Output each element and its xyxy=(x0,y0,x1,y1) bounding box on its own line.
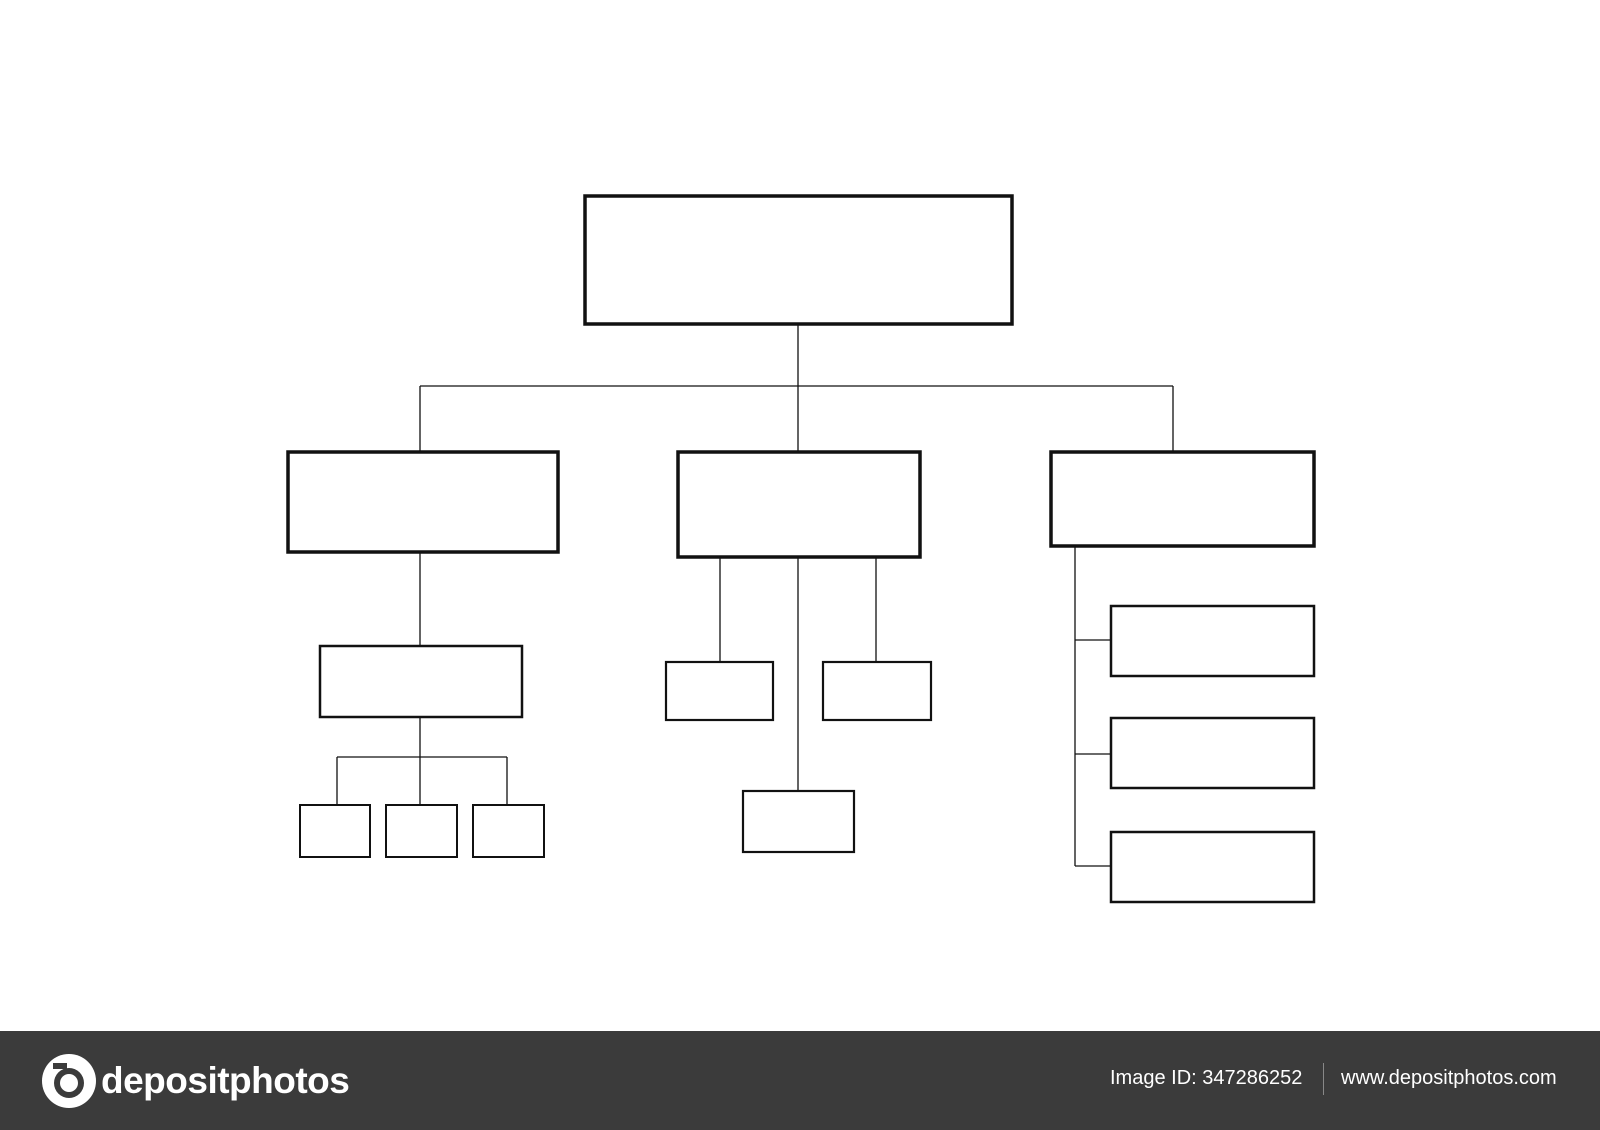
website: www.depositphotos.com xyxy=(1341,1067,1557,1089)
image id: Image ID: 347286252 xyxy=(1110,1067,1302,1089)
box: level 2 middle xyxy=(678,452,920,557)
logo: depositphotos xyxy=(101,1060,349,1101)
box: level 2 left xyxy=(288,452,558,552)
boxes: middle children xyxy=(666,662,931,852)
box: left level 3 xyxy=(320,646,522,717)
box: top xyxy=(585,196,1012,324)
box: level 2 right xyxy=(1051,452,1314,546)
icon: camera logo xyxy=(42,1054,96,1108)
boxes: right children xyxy=(1111,606,1314,902)
logo xyxy=(42,1054,349,1108)
footer bar xyxy=(0,1031,1600,1130)
boxes: left level 4 xyxy=(300,805,544,857)
